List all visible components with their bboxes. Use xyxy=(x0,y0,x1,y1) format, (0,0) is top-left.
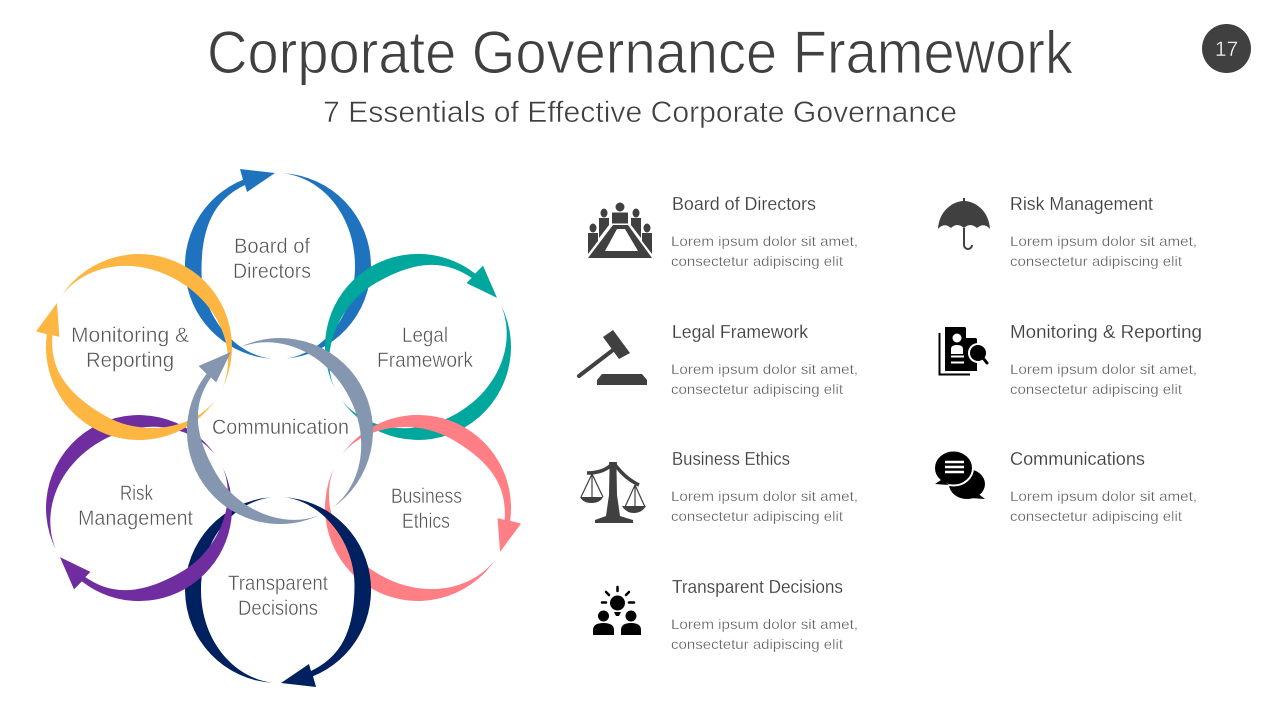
item: board of directors: consectetur adipiscing elit xyxy=(671,253,843,269)
ring label: risk management xyxy=(78,482,193,530)
ring arrow: legal framework xyxy=(291,218,548,474)
ring label: business ethics xyxy=(391,485,462,533)
item: legal framework xyxy=(671,322,858,397)
item: board of directors: Board of Directors xyxy=(672,194,816,214)
subtitle: 7 Essentials of Effective Corporate Governance xyxy=(323,96,957,129)
ring arrow: communication xyxy=(151,301,407,558)
ring label: legal framework: Legal xyxy=(402,324,448,347)
item: communications xyxy=(1010,449,1197,524)
item: risk management: consectetur adipiscing elit xyxy=(1010,253,1182,269)
item: transparent decisions: Lorem ipsum dolor sit amet, xyxy=(671,616,858,632)
page number badge xyxy=(1202,24,1251,73)
ring label: monitoring and reporting: Monitoring & xyxy=(71,324,189,347)
item: legal framework: Legal Framework xyxy=(672,322,809,342)
item: monitoring and reporting: Lorem ipsum dolor sit amet, xyxy=(1010,361,1197,377)
ring label: communication: Communication xyxy=(212,416,349,439)
item: risk management: Lorem ipsum dolor sit amet, xyxy=(1010,233,1197,249)
ring arc: transparent decisions left crescent xyxy=(185,497,273,683)
item: monitoring and reporting: consectetur adipiscing elit xyxy=(1010,381,1182,397)
ring label: transparent decisions: Decisions xyxy=(238,597,318,620)
icon: umbrella xyxy=(938,198,990,249)
icon: scales of justice xyxy=(580,462,646,523)
item: communications: consectetur adipiscing elit xyxy=(1010,508,1182,524)
item: transparent decisions: consectetur adipiscing elit xyxy=(671,636,843,652)
item: legal framework: Lorem ipsum dolor sit amet, xyxy=(671,361,858,377)
item: monitoring and reporting xyxy=(1010,322,1202,397)
ring label: business ethics: Ethics xyxy=(402,510,450,533)
ring label: monitoring and reporting xyxy=(71,324,189,372)
ring arrow: business ethics xyxy=(291,381,549,637)
item: monitoring and reporting: Monitoring & Reporting xyxy=(1010,322,1202,342)
icon: chat bubbles xyxy=(934,450,985,499)
icon: monitoring document xyxy=(940,327,988,374)
item: communications: Communications xyxy=(1010,449,1145,469)
item: business ethics: Lorem ipsum dolor sit amet, xyxy=(671,488,858,504)
item: business ethics: consectetur adipiscing elit xyxy=(671,508,843,524)
ring label: transparent decisions: Transparent xyxy=(228,572,328,595)
item: legal framework: consectetur adipiscing elit xyxy=(671,381,843,397)
item: board of directors xyxy=(671,194,858,269)
ring label: business ethics: Business xyxy=(391,485,462,508)
item: business ethics xyxy=(671,449,858,524)
ring arrow: monitoring and reporting xyxy=(8,218,266,474)
item: board of directors: Lorem ipsum dolor sit amet, xyxy=(671,233,858,249)
item: risk management: Risk Management xyxy=(1010,194,1153,214)
item: transparent decisions: Transparent Decisions xyxy=(672,577,843,597)
ring label: legal framework xyxy=(377,324,473,372)
ring arrow: transparent decisions arrow crescent xyxy=(281,497,371,687)
ring arrow: board of directors xyxy=(185,169,371,359)
ring label: board of directors: Board of xyxy=(234,235,310,258)
ring label: legal framework: Framework xyxy=(377,349,473,372)
ring label: transparent decisions xyxy=(228,572,328,620)
item: business ethics: Business Ethics xyxy=(672,449,790,469)
ring label: risk management: Management xyxy=(78,507,193,530)
icon: transparent decisions xyxy=(593,587,641,635)
page number badge: 17 xyxy=(1215,38,1238,61)
icon: gavel xyxy=(579,330,647,385)
ring label: board of directors: Directors xyxy=(233,260,311,283)
ring label: monitoring and reporting: Reporting xyxy=(86,349,174,372)
ring label: risk management: Risk xyxy=(120,482,153,505)
item: risk management xyxy=(1010,194,1197,269)
item: transparent decisions xyxy=(671,577,858,652)
title: Corporate Governance Framework xyxy=(207,19,1074,86)
icon: board of directors xyxy=(588,202,652,258)
ring arrow: risk management xyxy=(9,381,266,637)
ring label: board of directors xyxy=(233,235,311,283)
item: communications: Lorem ipsum dolor sit amet, xyxy=(1010,488,1197,504)
